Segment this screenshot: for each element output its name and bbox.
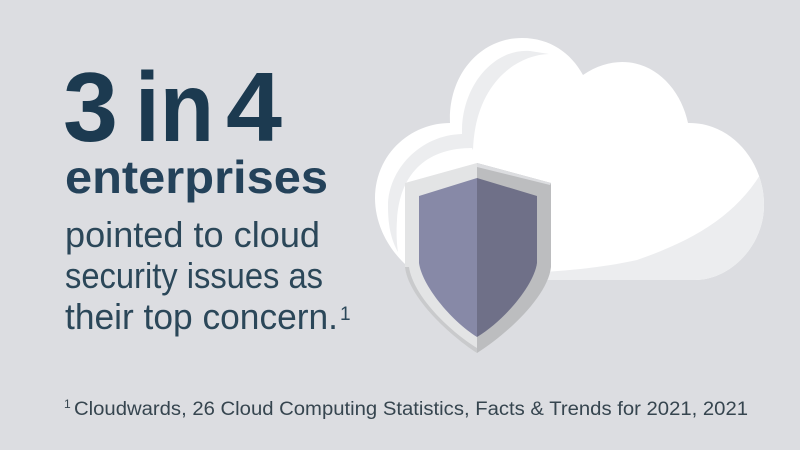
body text: security issues as [65,255,323,296]
body text [65,214,351,337]
footnote: 1 [64,397,71,411]
body text: 1 [340,304,351,325]
footnote: Cloudwards, 26 Cloud Computing Statistics, Facts & Trends for 2021, 2021 [74,399,748,420]
headline: 3 in 4: 4 [226,52,282,162]
icon: cloud [375,38,770,280]
body text: their top concern. [65,296,338,337]
subheading: enterprises: enterprises [65,151,328,203]
headline: 3 in 4: in [135,52,214,162]
headline: 3 in 4: 3 [63,52,118,162]
icon: shield [405,163,551,353]
body text: pointed to cloud [65,214,320,255]
headline: 3 in 4 [63,52,282,162]
